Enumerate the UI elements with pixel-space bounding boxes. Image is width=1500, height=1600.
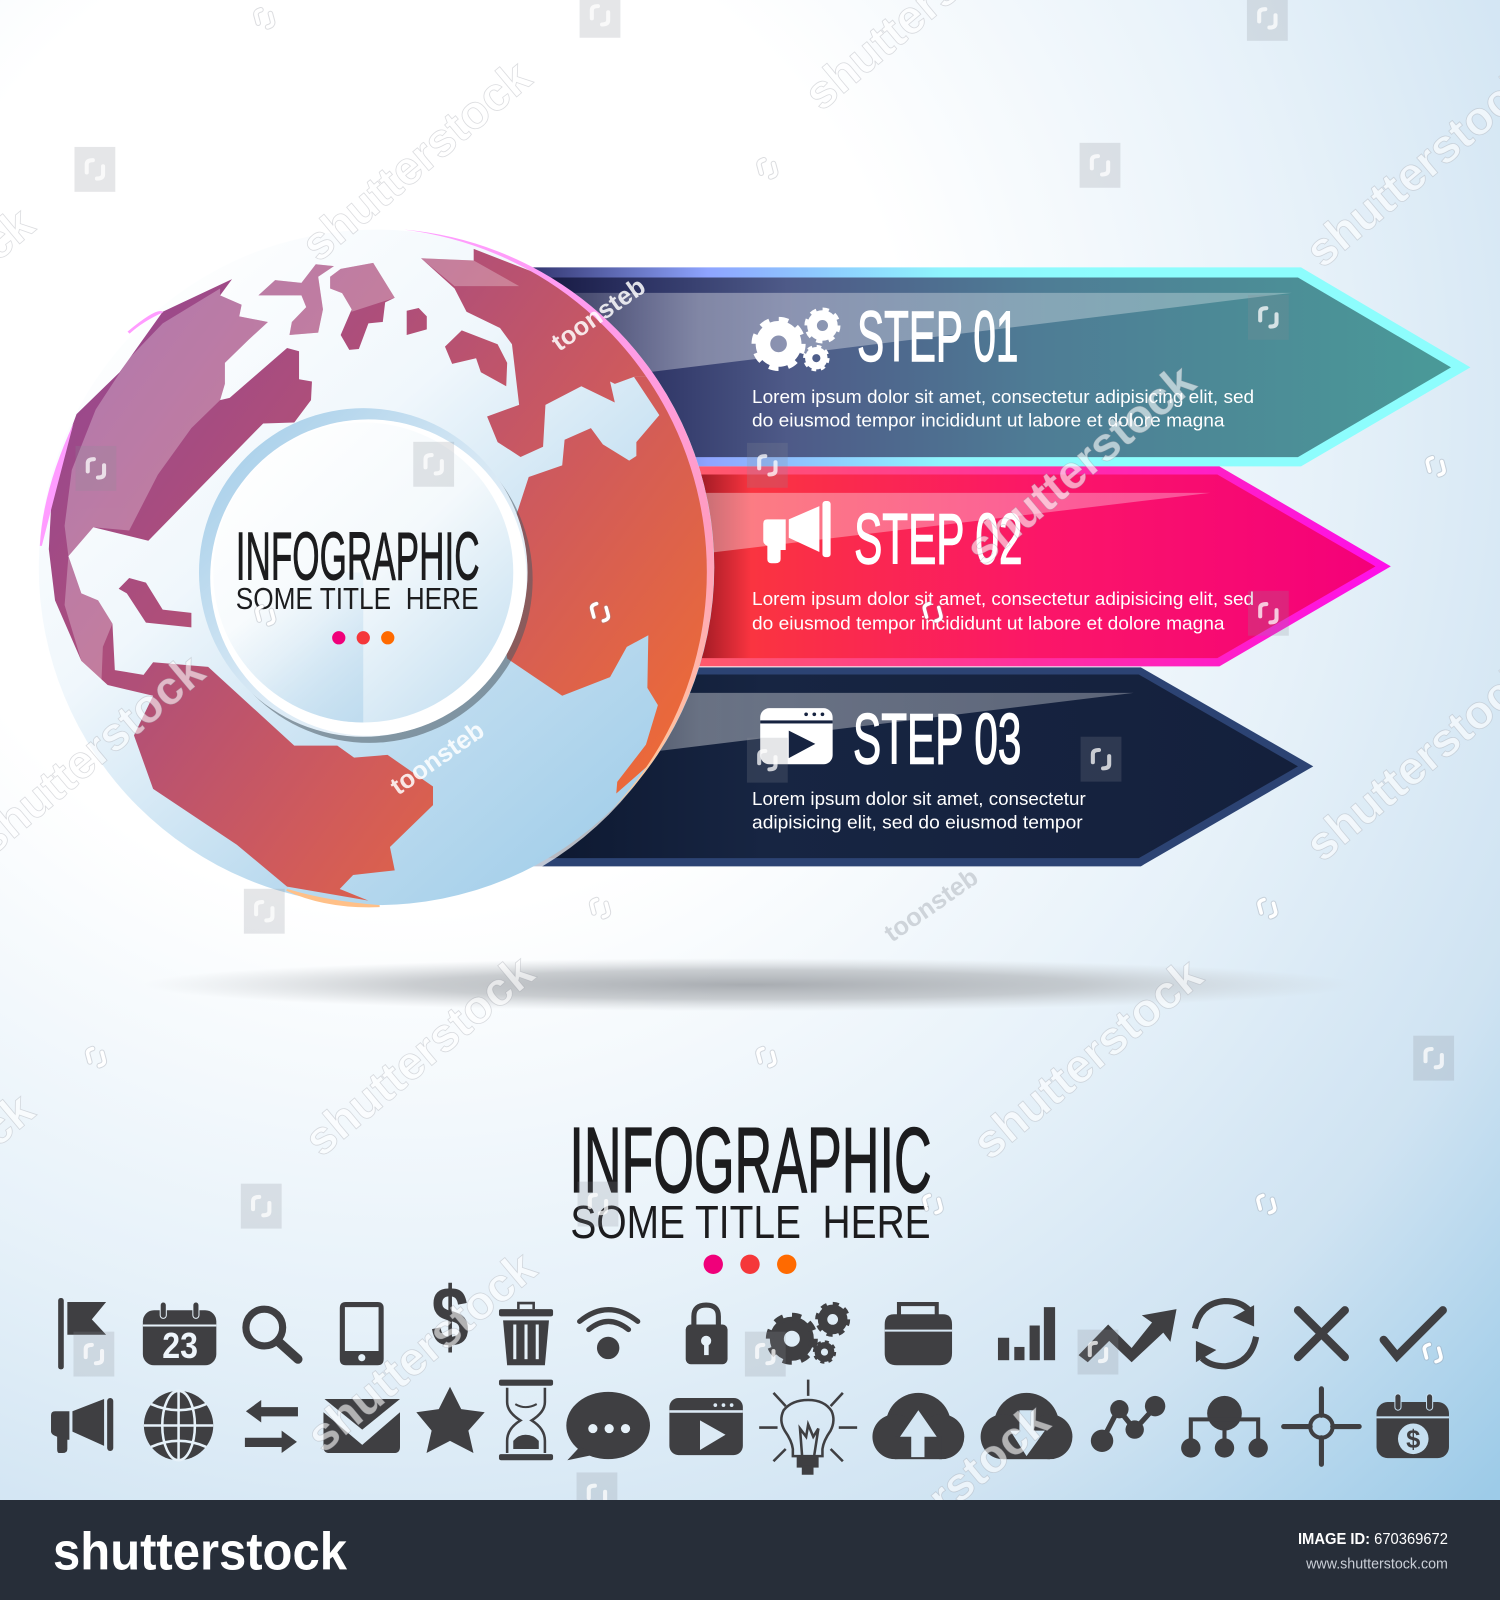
badge disc facet: [213, 572, 363, 722]
icon: briefcase: [885, 1304, 952, 1365]
globe sphere: [39, 230, 714, 905]
icon: megaphone: [763, 501, 831, 563]
icon: speech bubble: [566, 1392, 650, 1460]
icon: padlock: [686, 1305, 728, 1364]
heading: step 02: STEP 02: [854, 499, 1022, 579]
icon: cloud download: [981, 1393, 1072, 1459]
arrow sheen: [673, 493, 1210, 557]
icon: refresh: [1195, 1301, 1256, 1366]
step 02 description: do eiusmod tempor incididunt ut labore et dolore magna: [752, 613, 1225, 634]
icon: dollar: $: [431, 1269, 469, 1365]
panel: step 03 arrow: [526, 667, 1313, 866]
panel: step 01 arrow: [531, 267, 1470, 466]
arrow border: [526, 667, 1313, 866]
icon: gears: [756, 310, 838, 369]
watermarks: shutterstock: [956, 354, 1205, 575]
icon: trend arrow: [1079, 1309, 1177, 1362]
badge dots: [332, 631, 394, 644]
icon: calendar dollar: [1377, 1394, 1449, 1458]
icon: hourglass: [499, 1380, 553, 1460]
icon: star: [416, 1387, 485, 1453]
land highlight: [65, 258, 519, 682]
watermarks: toonsteb: [385, 716, 490, 801]
icon: calendar dollar: $: [1406, 1426, 1420, 1454]
dots: [704, 1255, 796, 1274]
icon: gears: [770, 1305, 847, 1362]
icon: line graph: [1091, 1396, 1165, 1452]
icon: video window: [669, 1398, 743, 1455]
step 03 description: [752, 788, 1086, 833]
panel: step 02 arrow: [673, 466, 1391, 666]
badge shadow: [206, 416, 533, 743]
icon: check: [1384, 1310, 1443, 1356]
step 01 description: [752, 386, 1254, 431]
watermarks: shutterstock: [291, 50, 541, 271]
step 02 description: [752, 588, 1254, 634]
badge ring: [199, 408, 528, 737]
footer url: www.shutterstock.com: [1305, 1556, 1448, 1572]
icon: envelope: [323, 1399, 400, 1453]
footer image id: IMAGE ID: 670369672: [1298, 1531, 1448, 1548]
arrow body: [526, 674, 1298, 858]
arrow border: [531, 267, 1470, 466]
step 01 description: Lorem ipsum dolor sit amet, consectetur adipisicing elit, sed: [752, 386, 1254, 407]
icon grid: [51, 1269, 1449, 1473]
icon: video window: [760, 708, 833, 764]
title: INFOGRAPHIC: [569, 1108, 932, 1212]
arrow body: [673, 474, 1376, 658]
globe halo: [29, 235, 708, 914]
watermarks: shutterstock: [963, 947, 1213, 1169]
arrow sheen: [531, 293, 1292, 387]
icon: cloud upload: [872, 1393, 964, 1459]
footer background: [0, 1500, 1500, 1600]
watermarks: toonsteb: [547, 272, 651, 357]
icon: hierarchy: [1181, 1396, 1268, 1458]
land: east continent: [498, 377, 711, 794]
icon: cross: [1298, 1310, 1345, 1357]
footer logo: shutterstock: [53, 1522, 347, 1581]
step 03 description: Lorem ipsum dolor sit amet, consectetur: [752, 788, 1086, 809]
land: north islands: [258, 263, 507, 386]
step 02 description: Lorem ipsum dolor sit amet, consectetur adipisicing elit, sed: [752, 588, 1254, 609]
icon: bar chart: [998, 1307, 1055, 1360]
badge title: INFOGRAPHIC: [236, 520, 480, 595]
globe: [29, 230, 714, 914]
bottom title block: [569, 1108, 932, 1274]
icon: wifi: [580, 1310, 638, 1359]
step 03 description: adipisicing elit, sed do eiusmod tempor: [752, 812, 1083, 833]
globe rim: bottom: [287, 890, 380, 906]
icon: flag: [58, 1298, 106, 1369]
continent: west and south land: [49, 279, 433, 901]
icon: target crosshair: [1284, 1389, 1359, 1464]
icon: calendar: [143, 1302, 216, 1366]
icon: trash can: [499, 1303, 553, 1365]
globe rim: right crescent: [404, 230, 714, 809]
land: north east continent: [421, 249, 655, 457]
arrow border: [673, 466, 1391, 666]
badge disc: [213, 422, 513, 722]
globe rim: left marks: [40, 311, 163, 546]
heading: step 03: STEP 03: [853, 699, 1021, 779]
badge white rim: [210, 419, 527, 736]
subtitle: SOME TITLE HERE: [570, 1196, 931, 1248]
watermarks: shutterstock: [294, 944, 544, 1166]
watermarks: toonsteb: [879, 863, 983, 948]
globe continents: [49, 249, 711, 901]
icon: transfer arrows: [245, 1400, 298, 1453]
icon: world globe: [144, 1391, 213, 1460]
icon: smartphone: [340, 1302, 384, 1365]
footer bar: [0, 1500, 1500, 1600]
icon: light bulb: [759, 1380, 857, 1473]
watermarks: shutterstock: [296, 1240, 546, 1462]
step 01 description: do eiusmod tempor incididunt ut labore et dolore magna: [752, 410, 1225, 431]
icon: calendar: 23: [162, 1326, 198, 1366]
center badge: [199, 408, 533, 743]
icon: search: [246, 1309, 298, 1359]
heading: step 01: STEP 01: [857, 297, 1018, 377]
badge subtitle: SOME TITLE HERE: [236, 582, 479, 616]
land: inner sea island: [119, 578, 191, 627]
icon: megaphone: [51, 1398, 113, 1453]
ground shadow: [143, 958, 1357, 1011]
arrow sheen: [526, 693, 1134, 767]
arrow body: [531, 278, 1451, 457]
